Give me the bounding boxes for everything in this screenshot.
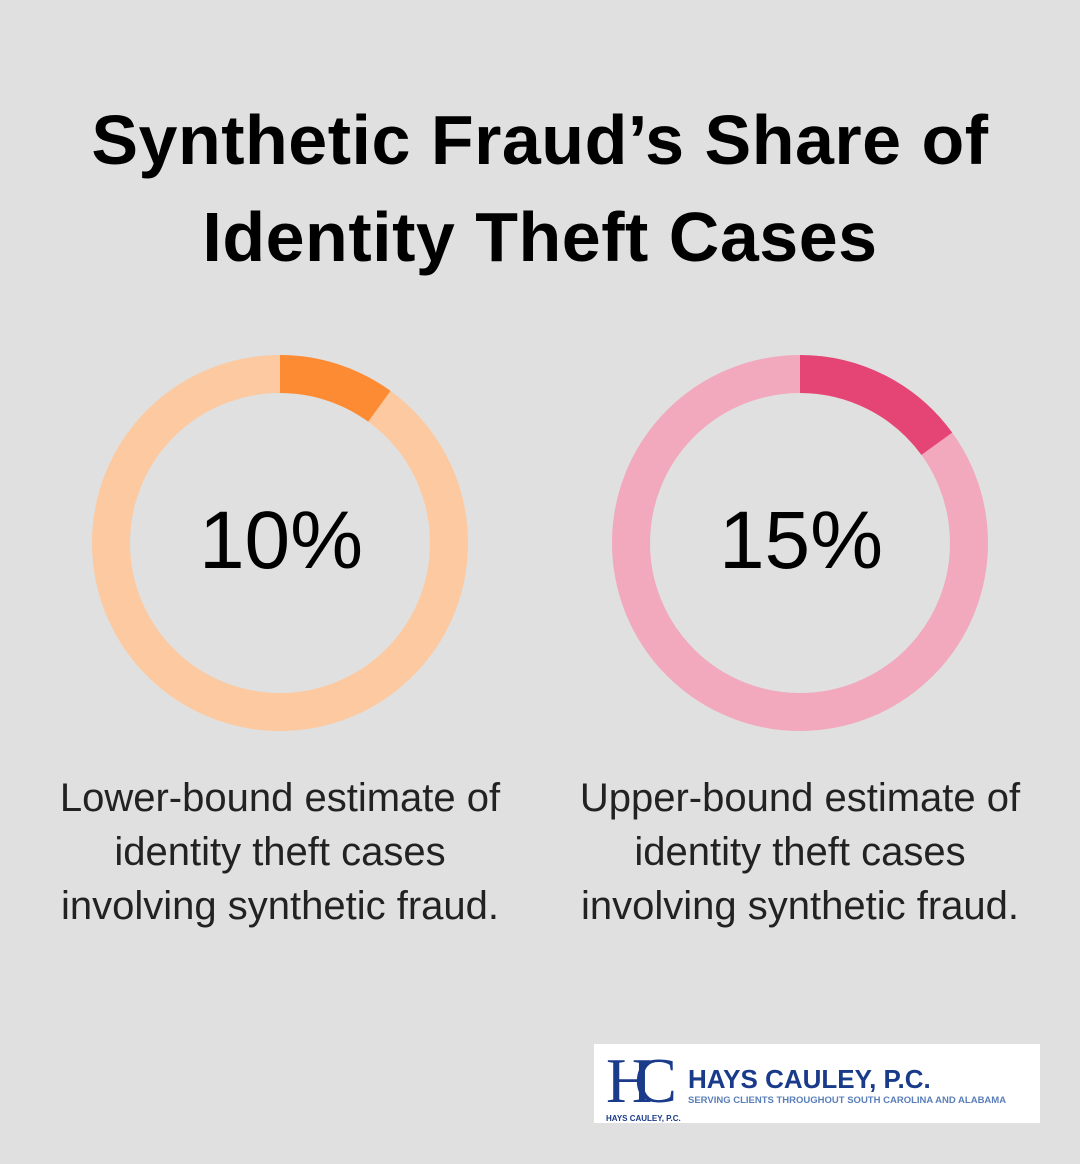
logo mark: HC bbox=[606, 1045, 659, 1116]
logo name: HAYS CAULEY, P.C. bbox=[688, 1064, 931, 1094]
donut: 10% bbox=[111, 374, 449, 712]
title bbox=[91, 101, 989, 276]
donut: 10%: 10% bbox=[199, 495, 363, 586]
caption left: Lower-bound estimate of identity theft cases involving synthetic fraud. bbox=[60, 776, 500, 928]
logo bbox=[594, 1044, 1040, 1123]
logo: HAYS CAULEY, P.C. bbox=[606, 1114, 681, 1123]
title: Identity Theft Cases bbox=[202, 198, 878, 276]
donut charts bbox=[92, 355, 988, 731]
donut: 15% bbox=[631, 374, 969, 712]
caption right: Upper-bound estimate of identity theft cases involving synthetic fraud. bbox=[580, 776, 1020, 928]
logo: SERVING CLIENTS THROUGHOUT SOUTH CAROLINA AND ALABAMA bbox=[688, 1095, 1006, 1106]
donut: 15%: 15% bbox=[719, 495, 883, 586]
title: Synthetic Fraud’s Share of bbox=[91, 101, 989, 179]
